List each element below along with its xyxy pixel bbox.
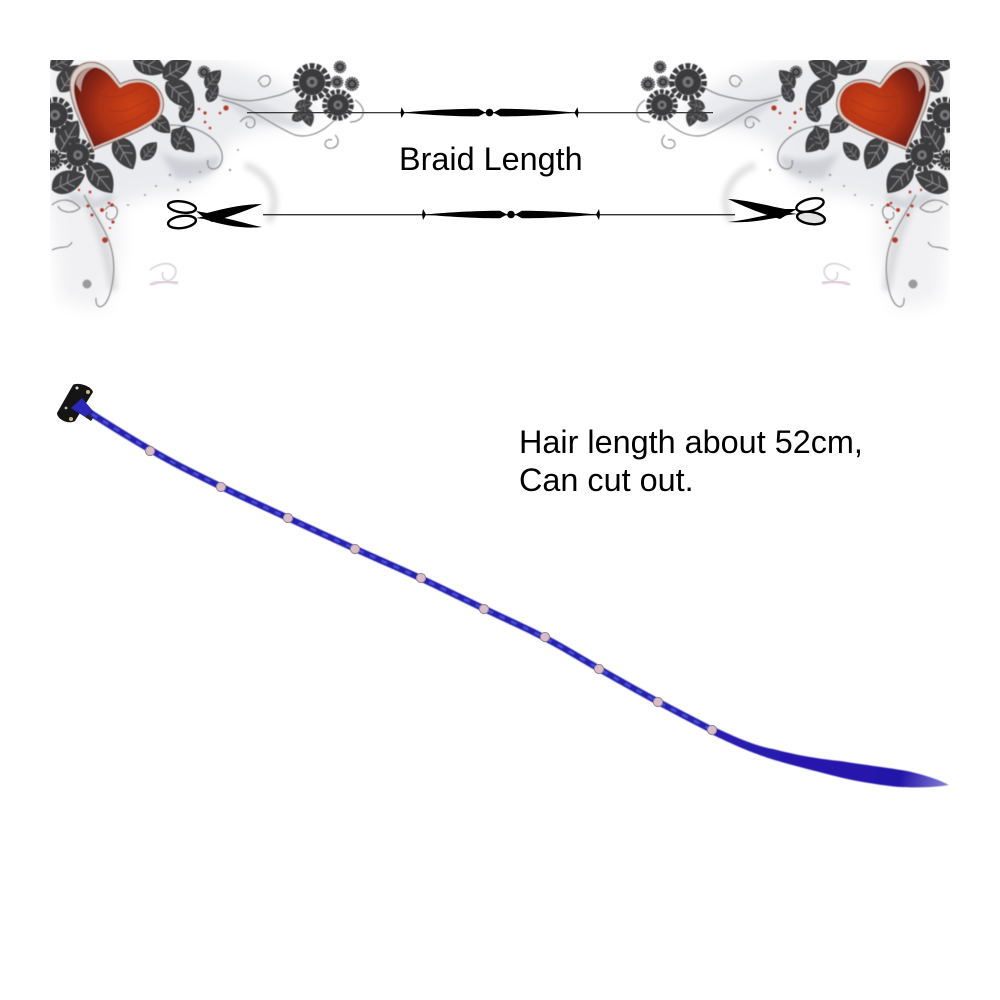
top rule with ornament: [247, 107, 713, 118]
length note: Hair length about 52cm,: [519, 424, 863, 460]
rhinestones: [145, 446, 717, 735]
length note: [519, 424, 863, 498]
length note: Can cut out.: [519, 462, 694, 498]
right floral corner with heart: [637, 47, 961, 310]
bottom rule with ornament: [263, 209, 735, 220]
icon: left scissors: [167, 200, 262, 230]
clip: [57, 384, 96, 422]
icon: right scissors: [728, 196, 826, 226]
braided hair extension: [57, 384, 949, 787]
heading: Braid Length: [399, 141, 583, 177]
tail: [711, 726, 949, 787]
braid: [92, 414, 712, 730]
left floral corner with heart: [39, 47, 363, 310]
